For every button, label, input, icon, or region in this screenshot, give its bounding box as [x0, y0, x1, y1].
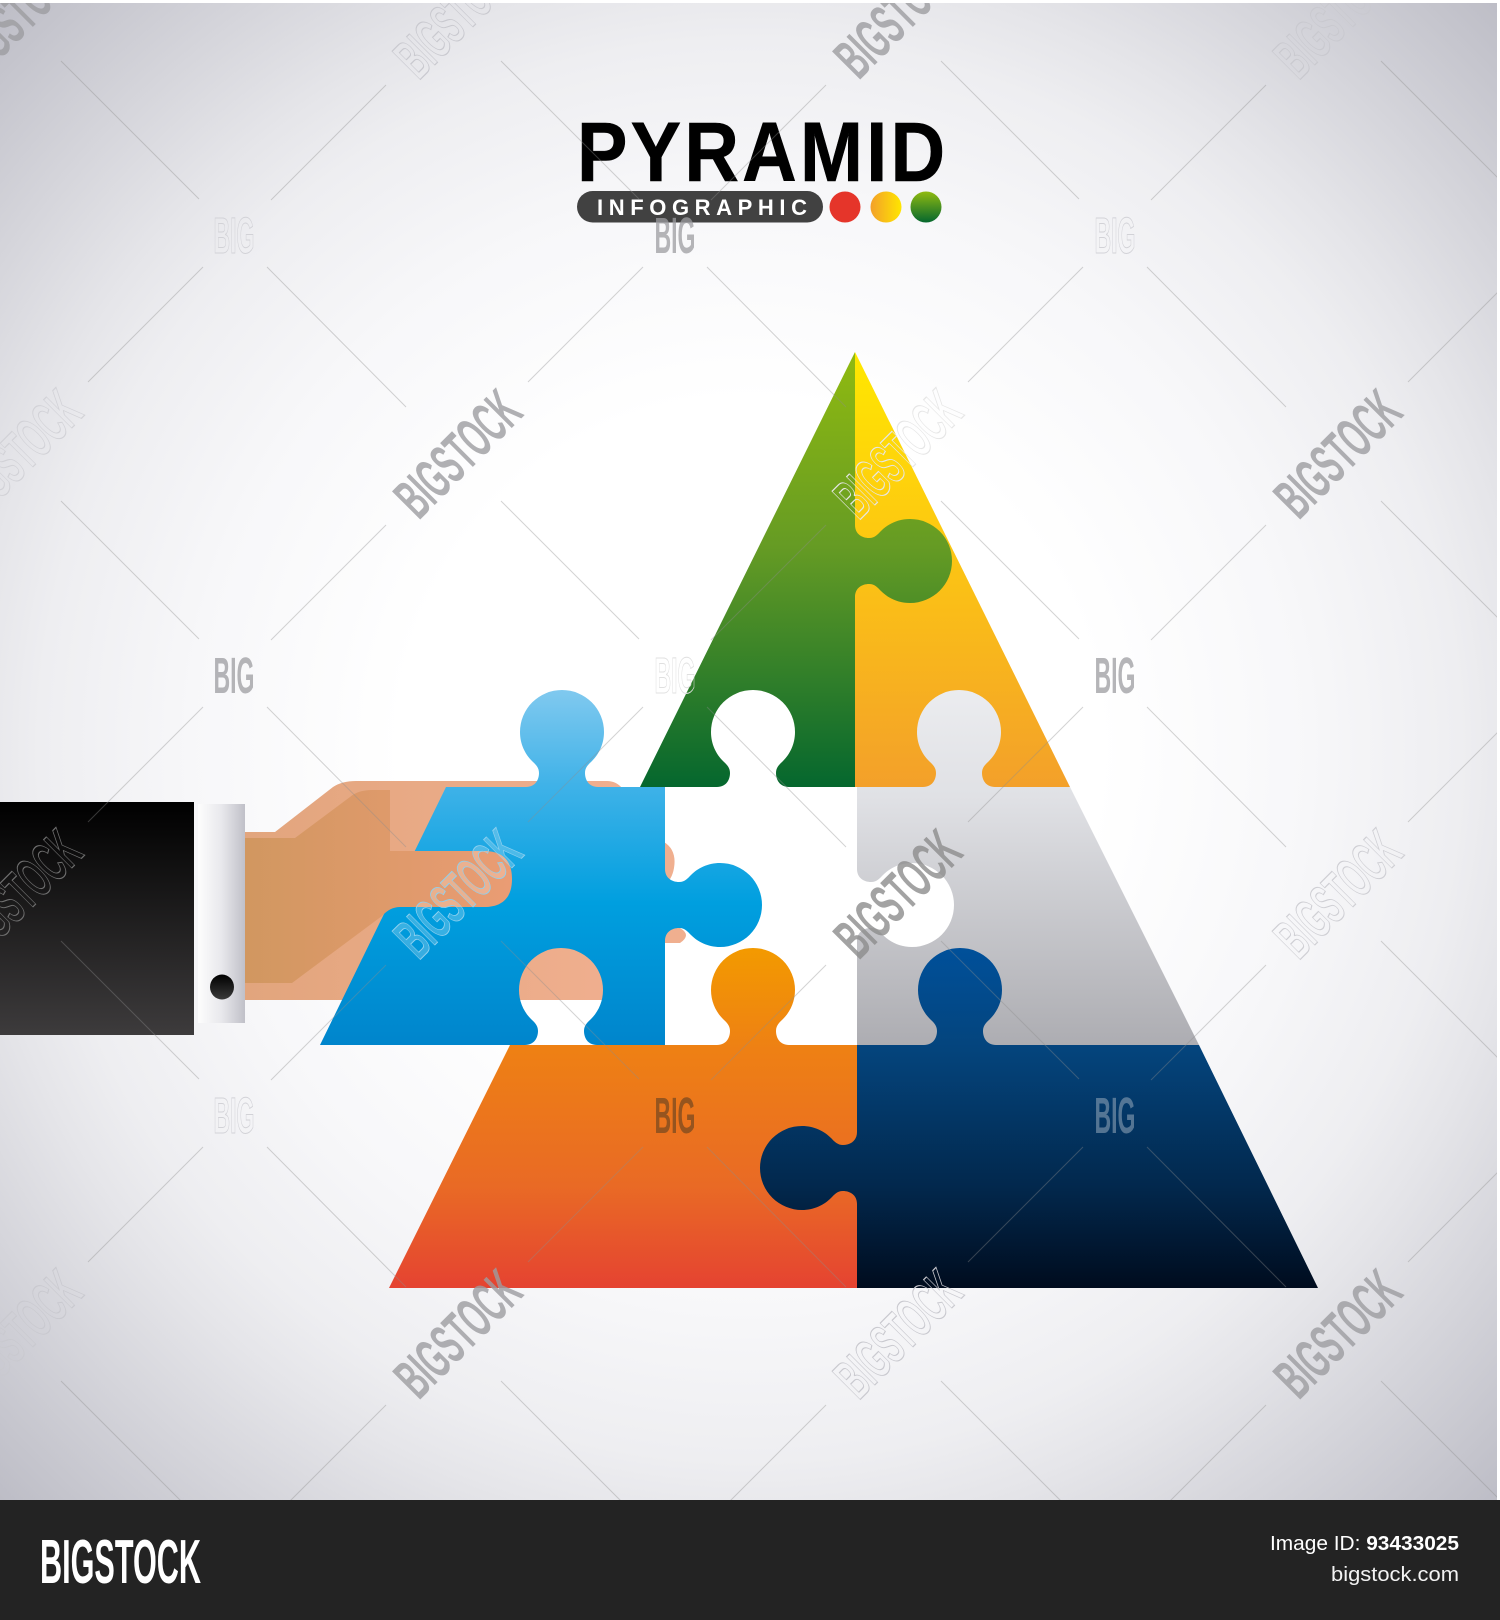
footer bar	[0, 1500, 1500, 1620]
image id: Image ID: 93433025	[1270, 1533, 1459, 1555]
watermark BIG marks: BIG	[214, 207, 254, 264]
jacket sleeve	[0, 802, 194, 1035]
watermark BIG marks: BIG	[214, 647, 254, 704]
watermark BIG marks	[214, 207, 1136, 1144]
watermark row 3: BIGSTOCK	[382, 818, 534, 970]
watermarks: BIG	[1094, 1087, 1136, 1144]
piece: navy bottom right	[760, 948, 1318, 1288]
watermark BIG marks: BIG	[214, 1087, 254, 1144]
piece: yellow top right	[855, 352, 1070, 787]
cuff button	[210, 974, 234, 1000]
footer bar: BIGSTOCK	[40, 1528, 201, 1597]
watermarks: BIG	[1094, 207, 1136, 264]
watermark row 2	[0, 378, 1414, 530]
piece: blue held by hand	[320, 690, 762, 1045]
shirt cuff	[198, 804, 245, 1023]
arm and hand	[0, 781, 686, 1035]
title: PYRAMID: PYRAMID	[577, 105, 945, 199]
hand back and fingers	[245, 781, 686, 1000]
watermark BIG marks: BIG	[654, 1087, 696, 1144]
watermark row 2: BIGSTOCK	[822, 378, 974, 530]
title block	[577, 105, 945, 222]
green dot	[910, 192, 942, 222]
subtitle text: INFOGRAPHIC	[597, 195, 807, 220]
watermark BIG marks: BIG	[654, 647, 696, 704]
watermark row 4	[0, 1258, 1414, 1410]
watermark row 3: BIGSTOCK	[822, 818, 974, 970]
watermark row 1	[0, 0, 1414, 90]
puzzle pyramid	[389, 352, 1318, 1288]
piece: orange bottom left	[389, 948, 857, 1288]
yellow dot	[870, 192, 902, 222]
site url: bigstock.com	[1331, 1564, 1459, 1586]
palm and thumb	[245, 790, 512, 983]
piece: gray middle right	[857, 690, 1199, 1045]
piece: empty white slot	[650, 690, 954, 1045]
watermark BIG marks: BIG	[654, 207, 696, 264]
watermark row 3	[0, 818, 1414, 970]
subtitle pill	[577, 191, 823, 222]
watermarks: BIG	[1094, 647, 1136, 704]
red dot	[830, 192, 860, 222]
watermark row 4: BIGSTOCK	[382, 1258, 534, 1410]
watermark row 4: BIGSTOCK	[822, 1258, 974, 1410]
watermark row 2: BIGSTOCK	[382, 378, 534, 530]
piece: green top left	[640, 352, 952, 787]
